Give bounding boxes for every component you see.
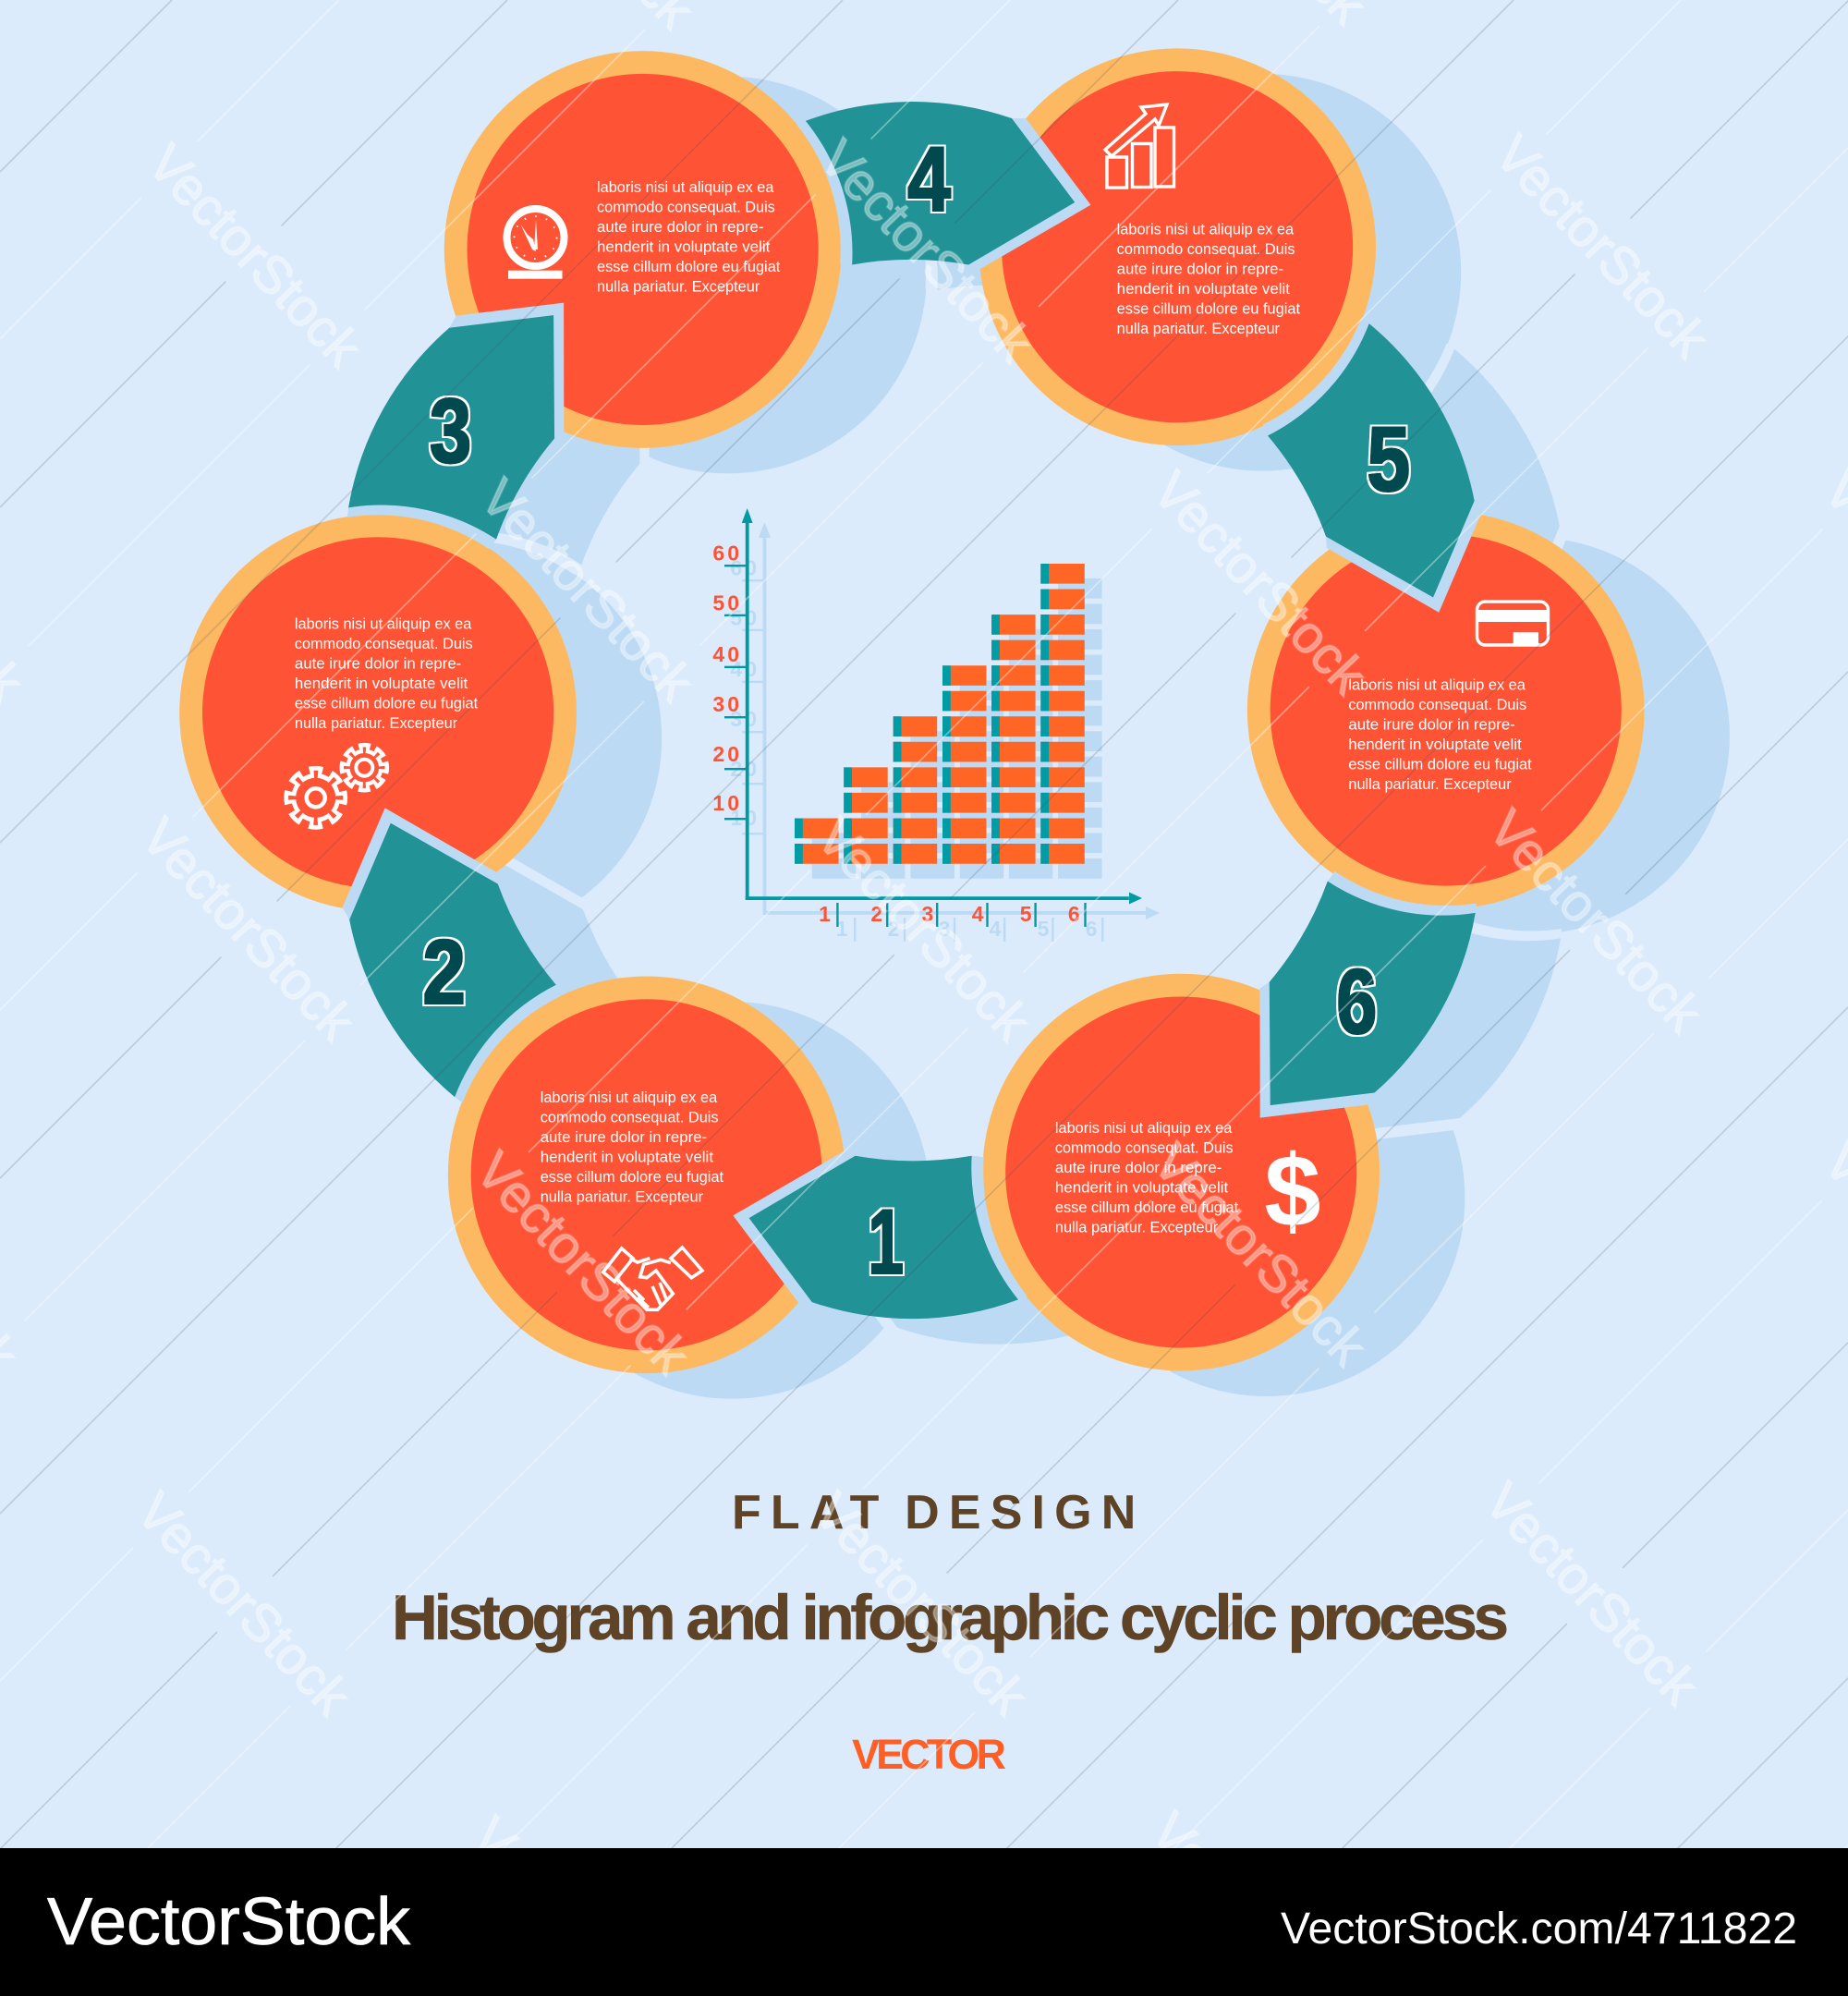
chart shadow: 6 — [1086, 917, 1097, 941]
watermark text: VectorStock — [1483, 124, 1720, 369]
title: histogram: Histogram and infographic cyclic process — [392, 1582, 1509, 1653]
watermark text: Ve — [1139, 1802, 1224, 1887]
panel: bottom-left circle: aute irure dolor in repre- — [541, 1128, 707, 1146]
panel: left circle — [179, 514, 577, 911]
column 5 — [996, 615, 1014, 864]
panel: top-right circle: aute irure dolor in repre- — [1117, 260, 1283, 277]
icon: gears — [284, 742, 390, 830]
column 6 — [1045, 564, 1063, 864]
panel: left circle: laboris nisi ut aliquip ex ea — [295, 615, 472, 632]
chart labels: 40 — [712, 642, 742, 666]
title: flat design: FLAT DESIGN — [732, 1486, 1145, 1540]
chart shadow: 10 — [730, 806, 760, 830]
arrow 5 — [1235, 306, 1528, 645]
panel: top-left circle: henderit in voluptate velit — [597, 237, 771, 255]
chart labels: 2 — [870, 902, 882, 926]
ring shadow layer — [265, 74, 1730, 1399]
chart labels: 20 — [712, 742, 742, 766]
icon: clock — [506, 209, 564, 279]
icon: rising bar chart — [1105, 104, 1173, 188]
watermark text: VectorStock — [802, 1481, 1040, 1726]
panel: top-left circle: commodo consequat. Duis — [597, 198, 775, 215]
chart labels: 5 — [1020, 902, 1032, 926]
column 1 — [798, 819, 817, 864]
chart shadow: 30 — [730, 707, 760, 731]
icon: handshake — [603, 1248, 702, 1309]
panel: top-left circle: nulla pariatur. Excepteur — [597, 277, 760, 295]
chart shadow: 5 — [1038, 917, 1050, 941]
watermark text: VectorStock — [1141, 460, 1379, 705]
panel: top-left circle: esse cillum dolore eu fugiat — [597, 258, 781, 275]
chart shadow: 20 — [730, 757, 760, 781]
watermark text: VectorStock — [1141, 1132, 1379, 1377]
chart bars — [798, 564, 1063, 864]
watermark text: VectorStock — [125, 1481, 362, 1726]
panel: bottom-left circle — [448, 976, 845, 1373]
panel: bottom-right circle: nulla pariatur. Excepteur — [1055, 1218, 1219, 1235]
watermark text: VectorStock — [1473, 1471, 1710, 1716]
subtitle: vector: VECTOR — [852, 1731, 1006, 1778]
watermark text: VectorStock — [468, 468, 706, 712]
panel: bottom-left circle: esse cillum dolore eu fugiat — [541, 1168, 723, 1186]
panel: bottom-left circle: laboris nisi ut aliquip ex ea — [541, 1089, 718, 1106]
panel: top-left circle — [444, 51, 841, 448]
footer url: VectorStock.com/4711822 — [1281, 1905, 1797, 1953]
chart labels: 1 — [819, 902, 831, 926]
icon: credit card — [1477, 602, 1549, 645]
panel: bottom-right circle — [982, 974, 1380, 1370]
column 4 — [946, 665, 965, 864]
panel: top-right circle: esse cillum dolore eu fugiat — [1117, 299, 1300, 317]
arrow 6 — [1204, 831, 1497, 1169]
chart shadow: 60 — [730, 556, 760, 580]
footer brand: VectorStock — [47, 1885, 411, 1959]
chart labels: 10 — [712, 791, 742, 815]
panel: left circle: nulla pariatur. Excepteur — [295, 714, 458, 732]
chart labels: 4 — [972, 902, 984, 926]
chart shadow: 1 — [836, 917, 848, 941]
icon: dollar sign: $ — [1264, 1135, 1321, 1248]
watermark text: VectorStock — [129, 807, 367, 1052]
panel: bottom-right circle: commodo consequat. Duis — [1055, 1138, 1234, 1156]
panel: right circle: esse cillum dolore eu fugiat — [1348, 756, 1532, 773]
panel: top-right circle: nulla pariatur. Excepteur — [1117, 320, 1280, 337]
watermark text: Ve — [460, 1807, 545, 1892]
panel: left circle: aute irure dolor in repre- — [295, 654, 461, 672]
panel: bottom-right circle: henderit in voluptate velit — [1055, 1178, 1229, 1196]
column 2 — [848, 767, 866, 864]
panel: bottom-right circle: laboris nisi ut aliquip ex ea — [1055, 1119, 1233, 1137]
watermark text: VectorStock — [808, 128, 1045, 373]
step numbers: 2 — [422, 921, 466, 1024]
chart axes — [724, 508, 1142, 927]
watermark text: VectorStock — [1477, 798, 1714, 1043]
panel: top-right circle: henderit in voluptate velit — [1117, 280, 1290, 298]
column 3 — [897, 716, 915, 864]
panel: bottom-left circle: commodo consequat. Duis — [541, 1108, 719, 1126]
step numbers: 3 — [430, 381, 471, 483]
panel: right circle: aute irure dolor in repre- — [1348, 716, 1515, 734]
watermark text: VectorStock — [805, 807, 1042, 1052]
panel: bottom-right circle: esse cillum dolore eu fugiat — [1055, 1199, 1239, 1216]
panel: top-left circle: aute irure dolor in repre- — [597, 218, 763, 236]
panel: left circle: commodo consequat. Duis — [295, 635, 473, 652]
chart labels: 60 — [712, 542, 742, 566]
chart shadow — [730, 522, 1160, 942]
watermark text: VectorStock — [464, 1140, 701, 1385]
chart shadow: 50 — [730, 606, 760, 630]
panel: right circle: laboris nisi ut aliquip ex ea — [1348, 676, 1526, 694]
panel: top-right circle — [979, 48, 1376, 445]
step numbers: 1 — [868, 1191, 904, 1294]
chart shadow: 3 — [939, 917, 950, 941]
chart shadow: 40 — [730, 657, 760, 681]
panel: bottom-left circle: nulla pariatur. Excepteur — [541, 1187, 703, 1205]
chart labels — [712, 542, 1080, 926]
panel: bottom-right circle: aute irure dolor in repre- — [1055, 1159, 1222, 1176]
panel: left circle: henderit in voluptate velit — [295, 675, 468, 692]
chart labels: 6 — [1068, 902, 1080, 926]
panel: right circle: nulla pariatur. Excepteur — [1348, 775, 1512, 793]
histogram chart — [712, 508, 1160, 942]
chart shadow: 4 — [990, 917, 1002, 941]
step numbers: 5 — [1367, 408, 1410, 511]
arrow 2 — [296, 775, 589, 1114]
step numbers: 6 — [1336, 951, 1377, 1053]
panel: top-left circle: laboris nisi ut aliquip ex ea — [597, 178, 774, 196]
panel: top-right circle: commodo consequat. Duis — [1117, 240, 1295, 258]
panel: bottom-left circle: henderit in voluptate velit — [541, 1148, 713, 1165]
footer bar — [0, 1848, 1848, 1996]
panel: right circle: henderit in voluptate velit — [1348, 736, 1522, 753]
panel: left circle: esse cillum dolore eu fugiat — [295, 694, 479, 712]
panel: right circle — [1247, 512, 1645, 908]
chart labels: 3 — [922, 902, 933, 926]
chart labels: 50 — [712, 591, 742, 615]
chart shadow: 2 — [888, 917, 899, 941]
arrow 1 — [733, 1150, 1027, 1319]
step numbers: 4 — [907, 128, 951, 231]
step numbers — [422, 128, 1410, 1294]
panel: right circle: commodo consequat. Duis — [1348, 696, 1526, 713]
cycle diagram — [179, 48, 1645, 1373]
watermark text: VectorStock — [136, 133, 373, 378]
arrow 4 — [796, 102, 1090, 270]
arrow 3 — [327, 251, 620, 590]
chart labels: 30 — [712, 692, 742, 716]
panel: top-right circle: laboris nisi ut aliquip ex ea — [1117, 220, 1295, 237]
